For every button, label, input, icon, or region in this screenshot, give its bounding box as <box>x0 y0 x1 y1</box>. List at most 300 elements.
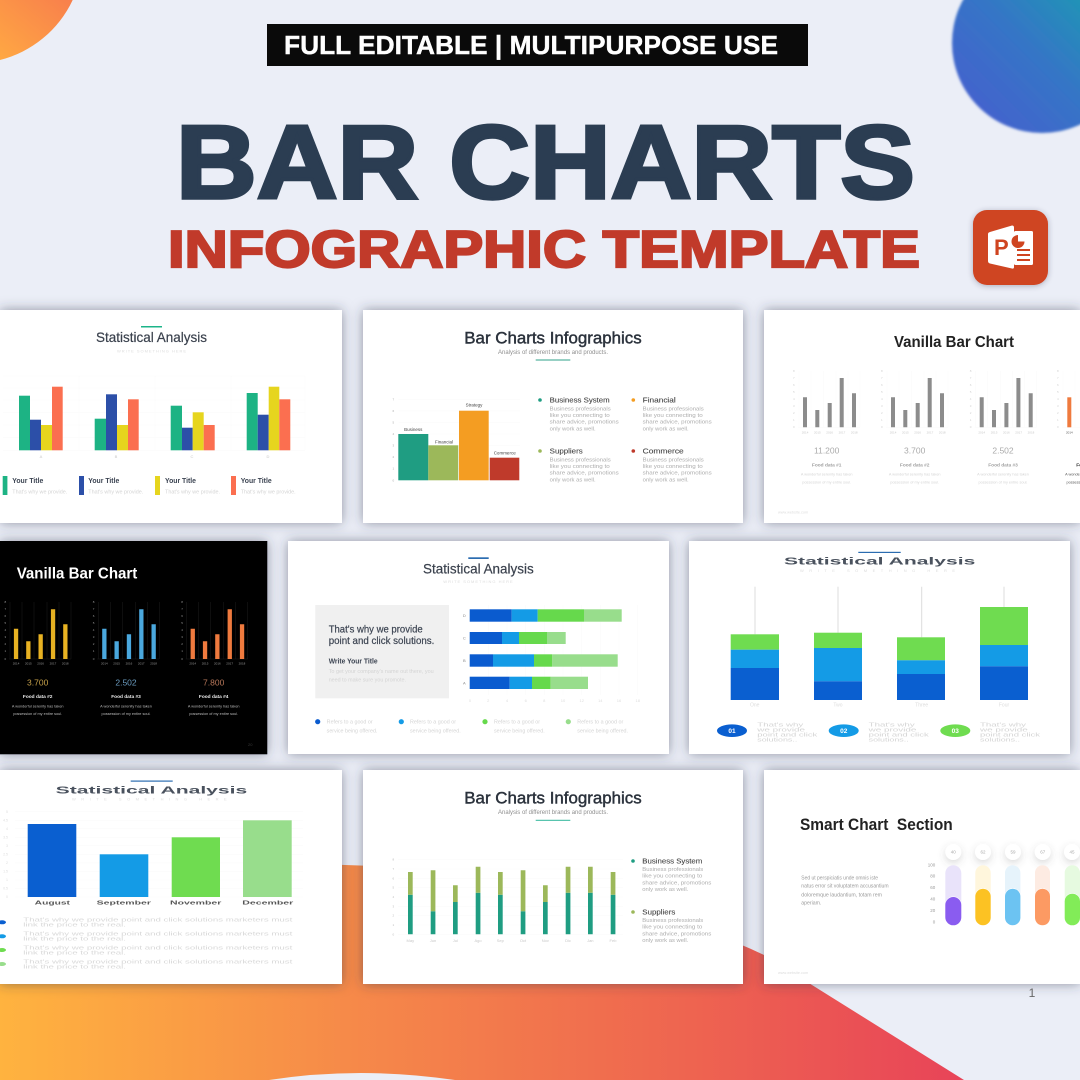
stat: dark food data 3: possession of my entire soul. <box>102 712 150 716</box>
body text: aperiam. <box>801 901 821 907</box>
legend: Your Title <box>88 478 119 485</box>
pill gauge: green <box>1064 844 1080 926</box>
y axis labels: 3 <box>392 444 394 448</box>
stat: food data 1: Food data #1 <box>812 462 842 468</box>
legend <box>0 918 293 971</box>
legend <box>315 719 628 734</box>
stat: dark food data 3: A wonderful serenity has taken <box>100 704 152 708</box>
small chart 1: 4 <box>793 397 795 401</box>
legend: That's why we provide. <box>88 490 144 496</box>
stat: dark food data 4 <box>188 677 240 716</box>
y axis labels: 5 <box>392 420 394 424</box>
legend: That's why we provide point and click solutions marketers must <box>23 960 293 966</box>
gold chart: 4 <box>4 628 6 632</box>
gold chart: 1 <box>4 649 6 653</box>
month labels: Jul <box>453 938 458 943</box>
legend: Your Title <box>241 478 272 485</box>
small chart 4 clipped by edge <box>1057 369 1080 434</box>
stat: food data 3 <box>977 446 1029 484</box>
body text: natus error sit voluptatem accusantium <box>801 884 889 890</box>
y axis labels: 0 <box>933 919 936 924</box>
callout 03 <box>940 723 1041 744</box>
y axis labels: 2 <box>392 455 394 459</box>
small chart 2: 7 <box>881 376 883 380</box>
y axis labels: 1 <box>6 878 8 882</box>
blue chart <box>93 600 159 666</box>
month labels: December <box>242 901 295 907</box>
axis labels: A <box>40 454 43 459</box>
item: commerce: only work as well. <box>643 477 689 483</box>
y axis labels: 0 <box>392 478 394 482</box>
small chart 4 clipped by edge: 5 <box>1057 390 1059 394</box>
panel heading: Statistical Analysis <box>56 785 248 797</box>
gold chart: 2 <box>4 642 6 646</box>
stacked bars lower series <box>408 893 615 934</box>
callout 01 <box>717 723 818 744</box>
pill gauge: blue: 59 <box>1010 850 1016 854</box>
accent line <box>858 552 901 553</box>
small chart 4 clipped by edge: 3 <box>1057 404 1059 408</box>
gold chart: 2014 2015 2016 2017 2018 <box>13 662 69 666</box>
small chart 1: 2014 2015 2016 2017 2018 <box>802 430 858 434</box>
y axis labels: 4 <box>392 895 394 899</box>
axis labels: 4 <box>506 698 509 703</box>
month labels <box>407 938 617 943</box>
month labels: Jun <box>430 938 436 943</box>
item: suppliers: Suppliers <box>642 907 676 916</box>
item: commerce <box>632 446 712 483</box>
y axis labels: 8 <box>392 858 394 862</box>
small chart 2: 4 <box>881 397 883 401</box>
stat: dark food data 3: 2.502 <box>115 677 137 687</box>
axis labels: D <box>267 454 270 459</box>
callout 02: 02 <box>840 728 848 735</box>
y axis labels: 0 <box>6 895 8 899</box>
item: suppliers: share advice, promotions <box>642 931 711 937</box>
orange chart: 2 <box>181 642 183 646</box>
gold chart: 5 <box>4 621 6 625</box>
stacked column four <box>980 607 1028 700</box>
month labels: Ago <box>474 938 482 943</box>
item: business system: Business professionals <box>550 406 611 412</box>
item: financial <box>632 395 712 432</box>
panel: statistical analysis vertical stacked bars <box>689 541 1070 754</box>
callout 01: we provide <box>757 728 805 734</box>
text card: That's why we provide <box>329 623 423 635</box>
text card: Write Your Title <box>329 657 378 666</box>
stacked bar D <box>470 609 622 622</box>
axis labels: 10 <box>561 698 566 703</box>
accent line <box>131 780 173 782</box>
y axis labels: 0 <box>392 932 394 936</box>
month labels <box>35 901 295 907</box>
y axis labels: 3 <box>6 844 8 848</box>
small chart 4 clipped by edge: 1 <box>1057 418 1059 422</box>
panel subheading: WRITE SOMETHING HERE <box>800 568 955 573</box>
banner: full editable: FULL EDITABLE | MULTIPURPOSE USE <box>284 30 778 60</box>
pill gauge: yellow: 62 <box>980 850 986 854</box>
blue chart: 2014 2015 2016 2017 2018 <box>101 662 157 666</box>
pill gauge: purple: 40 <box>951 850 956 854</box>
decorative orange circle top left <box>0 0 73 60</box>
axis labels: C <box>463 636 466 640</box>
small chart 3: 5 <box>970 390 972 394</box>
stat: dark food data 4: Food data #4 <box>199 694 229 700</box>
legend: That's why we provide. <box>165 490 220 496</box>
pill gauge: orange <box>1035 844 1051 926</box>
panel: statistical analysis monthly bars <box>0 770 342 984</box>
small chart 2: 2014 2015 2016 2017 2018 <box>890 430 946 434</box>
axis labels: D <box>463 613 466 618</box>
legend: service being offered. <box>410 728 461 734</box>
panel: bar charts infographics four segments <box>363 310 743 523</box>
small chart 1: 6 <box>793 383 795 387</box>
item: financial: Business professionals <box>643 406 704 412</box>
stat: food data 3: 2.502 <box>992 446 1014 456</box>
panel subheading: Analysis of different brands and products. <box>498 810 608 816</box>
small chart 2: 2 <box>881 411 883 415</box>
panel: vanilla bar chart dark <box>0 541 267 754</box>
orange chart <box>181 600 248 666</box>
orange chart: 2014 2015 2016 2017 2018 <box>189 662 246 666</box>
column labels <box>750 702 1009 708</box>
legend: link the price to the real. <box>23 951 126 957</box>
small chart 1 <box>793 369 860 434</box>
panel: bar charts infographics monthly stacked <box>363 770 743 984</box>
bar labels: Commerce <box>494 450 516 455</box>
item: financial: Financial <box>643 395 676 404</box>
y axis labels: 0.5 <box>3 886 8 890</box>
small chart 2: 1 <box>881 418 883 422</box>
small chart 3: 2014 2015 2016 2017 2018 <box>978 430 1035 434</box>
legend: Your Title <box>165 478 196 485</box>
y axis labels: 5 <box>6 810 8 814</box>
y axis labels: 7 <box>392 397 394 401</box>
item: business system: share advice, promotions <box>550 420 619 426</box>
item: business system: Business System <box>642 856 702 865</box>
stacked column two <box>814 633 862 700</box>
panel heading: Bar Charts Infographics <box>464 328 642 347</box>
column labels: Three <box>915 702 928 708</box>
bar chart <box>398 411 519 480</box>
stat: food data 2: 3.700 <box>904 446 926 456</box>
text card: need to make sure you promote. <box>329 677 406 683</box>
y axis labels: 6 <box>392 876 394 880</box>
item: suppliers: only work as well. <box>642 938 689 944</box>
axis labels: 8 <box>543 698 546 703</box>
legend: link the price to the real. <box>23 923 126 929</box>
stat: dark food data 2 <box>12 677 64 716</box>
item: business system: like you connecting to <box>642 874 702 880</box>
legend: Your Title <box>12 478 43 485</box>
stat: food data 2: A wonderful serenity has taken <box>889 473 941 477</box>
stat: dark food data 2: 3.700 <box>27 677 49 687</box>
small chart 2 <box>881 369 948 434</box>
small chart 3: 8 <box>970 369 972 373</box>
gold chart: 7 <box>4 607 6 611</box>
legend: That's why we provide point and click solutions marketers must <box>23 932 293 938</box>
callout 02: we provide <box>869 728 917 734</box>
small chart 3: 7 <box>970 376 972 380</box>
month labels: November <box>170 901 223 907</box>
small chart 2: 8 <box>881 369 883 373</box>
month labels: Sep <box>497 938 505 943</box>
legend: That's why we provide point and click solutions marketers must <box>23 946 293 952</box>
stacked column three <box>897 637 945 700</box>
gold chart: 3 <box>4 635 6 639</box>
stat: food data 3: possession of my entire soul. <box>979 480 1027 484</box>
panel subheading: Analysis of different brands and products. <box>498 350 608 356</box>
month labels: Feb <box>610 938 617 943</box>
small chart 1: 1 <box>793 418 795 422</box>
legend: That's why we provide. <box>12 490 68 496</box>
blue chart: 3 <box>93 635 95 639</box>
text card: point and click solutions. <box>329 635 434 647</box>
panel subheading: WRITE SOMETHING HERE <box>443 579 513 584</box>
y axis labels: 2 <box>392 914 394 918</box>
panel: smart chart section <box>764 770 1080 984</box>
website footer: www.website.com <box>778 510 808 514</box>
blue chart: 2 <box>93 642 95 646</box>
y axis labels: 7 <box>392 867 394 871</box>
panel heading: Vanilla Bar Chart <box>894 334 1015 351</box>
item: suppliers: like you connecting to <box>642 925 702 931</box>
gold chart: 6 <box>4 614 6 618</box>
legend: Refers to a good or <box>577 720 624 726</box>
item: suppliers: Business professionals <box>642 918 703 924</box>
small chart 2: 5 <box>881 390 883 394</box>
pill gauge: orange: 67 <box>1040 850 1046 854</box>
background wave: orange to red gradient <box>0 863 964 1080</box>
bar labels: Strategy <box>466 403 483 408</box>
panel heading: Vanilla Bar Chart <box>17 565 138 582</box>
small chart 4 clipped by edge: 0 <box>1057 425 1059 429</box>
orange chart: 5 <box>181 621 183 625</box>
small chart 3: 3 <box>970 404 972 408</box>
y axis labels: 2.5 <box>3 852 8 856</box>
orange chart: 4 <box>181 628 183 632</box>
legend: link the price to the real. <box>23 937 126 943</box>
body text: doloremque laudantium, totam rem <box>801 892 882 898</box>
stat: dark food data 3 <box>100 677 152 716</box>
stat: food data 2 <box>889 446 941 484</box>
stat: food data 3: A wonderful serenity has taken <box>977 473 1029 477</box>
stat: dark food data 2: A wonderful serenity has taken <box>12 704 64 708</box>
small chart 3: 4 <box>970 397 972 401</box>
legend: Refers to a good or <box>327 720 373 726</box>
gold chart: 8 <box>4 600 6 604</box>
y axis labels: 80 <box>930 874 936 879</box>
axis labels: 14 <box>598 698 603 703</box>
panel: statistical analysis grouped bars <box>0 310 342 523</box>
orange chart: 3 <box>181 635 183 639</box>
item: business system: like you connecting to <box>550 413 610 419</box>
y axis labels: 5 <box>392 886 394 890</box>
stacked bars upper series <box>408 867 615 911</box>
blue chart: 4 <box>93 628 95 632</box>
y axis labels: 3.5 <box>3 836 8 840</box>
blue chart: 1 <box>93 649 95 653</box>
small chart 3 <box>970 369 1037 434</box>
item: commerce: Business professionals <box>643 457 704 463</box>
small chart 4 clipped by edge: 7 <box>1057 376 1059 380</box>
text card <box>315 605 449 698</box>
website footer: www.website.com <box>778 971 808 975</box>
small chart 3: 2 <box>970 411 972 415</box>
icon: powerpoint: P <box>994 235 1009 260</box>
y axis labels: 100 <box>928 863 936 868</box>
bar chart <box>28 820 292 897</box>
panel heading: Statistical Analysis <box>784 555 976 567</box>
axis labels: 2 <box>487 698 490 703</box>
item: suppliers <box>631 907 711 944</box>
callout 02: That's why <box>869 723 915 729</box>
stat: food data 1: 11.200 <box>814 446 840 456</box>
y axis labels: 6 <box>392 409 394 413</box>
item: financial: like you connecting to <box>643 413 703 419</box>
item: suppliers: Suppliers <box>550 446 583 455</box>
icon: powerpoint <box>973 210 1048 285</box>
item: commerce: Commerce <box>643 446 684 455</box>
small chart 1: 0 <box>793 425 795 429</box>
blue chart: 7 <box>93 607 95 611</box>
legend: service being offered. <box>327 728 377 734</box>
y axis labels: 4.5 <box>3 818 8 822</box>
orange chart: 0 <box>181 657 183 661</box>
item: suppliers: only work as well. <box>550 477 596 483</box>
stacked bar C <box>470 632 566 644</box>
axis labels: A <box>463 680 466 686</box>
pill gauge: green: 45 <box>1069 850 1075 854</box>
small chart 1: 8 <box>793 369 795 373</box>
grid lines <box>398 399 520 469</box>
item: financial: share advice, promotions <box>643 420 712 426</box>
y axis labels: 4 <box>6 827 8 831</box>
callout 02: point and click <box>869 733 929 739</box>
stems <box>755 587 1004 637</box>
legend: service being offered. <box>494 728 545 734</box>
page number: 1 <box>1029 986 1036 1000</box>
blue chart: 5 <box>93 621 95 625</box>
title: bar charts: BAR CHARTS <box>176 105 915 221</box>
pill gauge: blue <box>1005 844 1021 926</box>
page number: 20 <box>248 742 253 747</box>
panel heading: Statistical Analysis <box>423 560 534 576</box>
month labels: September <box>97 901 152 907</box>
small chart 4 clipped by edge: 2014 <box>1066 430 1073 434</box>
axis labels: C <box>191 454 194 459</box>
small chart 4 clipped by edge: 2 <box>1057 411 1059 415</box>
legend: Refers to a good or <box>494 720 540 726</box>
y axis labels: 4 <box>392 432 394 436</box>
stacked bar B <box>470 654 618 667</box>
callout 02: solutions.. <box>869 738 909 744</box>
callout 03: That's why <box>980 723 1027 729</box>
stat: dark food data 4: 7.800 <box>203 677 225 687</box>
accent line <box>536 820 570 821</box>
y axis labels: 40 <box>930 896 936 901</box>
callout 01: point and click <box>757 733 818 739</box>
item: commerce: like you connecting to <box>643 464 703 470</box>
y axis labels <box>928 863 936 924</box>
month labels: Nov <box>542 938 549 943</box>
column labels: One <box>750 702 760 708</box>
small chart 1: 5 <box>793 390 795 394</box>
axis labels: 18 <box>635 698 641 703</box>
axis labels: 0 <box>469 698 472 703</box>
blue chart: 8 <box>93 600 95 604</box>
panel heading: Bar Charts Infographics <box>464 789 642 808</box>
stat: dark food data 4: possession of my entire soul. <box>189 712 238 716</box>
stat: dark food data 3: Food data #3 <box>111 694 141 700</box>
small chart 2: 3 <box>881 404 883 408</box>
axis labels: 12 <box>579 698 585 703</box>
blue chart: 6 <box>93 614 95 618</box>
body text <box>801 875 889 907</box>
item: suppliers: like you connecting to <box>550 464 610 470</box>
pill gauge: yellow <box>975 844 991 926</box>
callout 03: 03 <box>952 728 959 735</box>
stat: food data 1: possession of my entire soul. <box>802 480 851 484</box>
legend: Refers to a good or <box>410 720 456 726</box>
small chart 2: 6 <box>881 383 883 387</box>
callout 01: 01 <box>728 728 736 735</box>
stat: food data 2: possession of my entire soul. <box>890 480 939 484</box>
text card: To get your company's name out there, you <box>329 669 434 675</box>
small chart 4 clipped by edge: 8 <box>1057 369 1059 373</box>
month labels: August <box>35 901 70 907</box>
stat: dark food data 2: possession of my entire soul. <box>13 712 62 716</box>
stat: dark food data 2: Food data #2 <box>23 694 53 700</box>
stat: food data 1 <box>801 446 853 484</box>
item: business system <box>538 395 619 432</box>
small chart 3: 0 <box>970 425 972 429</box>
callout 02 <box>829 723 929 744</box>
group B bars <box>95 394 139 450</box>
bar labels <box>404 403 516 455</box>
panel heading: Smart Chart Section <box>800 816 953 834</box>
item: suppliers: share advice, promotions <box>550 471 619 477</box>
small chart 3: 1 <box>970 418 972 422</box>
bar labels: Business <box>404 427 423 432</box>
item: business system: Business System <box>550 395 610 404</box>
legend: link the price to the real. <box>23 965 126 971</box>
y axis labels: 60 <box>930 885 936 890</box>
y axis labels: 1 <box>392 923 394 927</box>
callout 03: point and click <box>980 733 1041 739</box>
small chart 4 clipped by edge: 4 <box>1057 397 1059 401</box>
y axis labels: 2 <box>6 861 8 865</box>
callout 03: solutions.. <box>980 738 1020 744</box>
gold chart <box>4 600 71 666</box>
grid lines <box>398 860 623 934</box>
stat: food data 2: Food data #2 <box>900 462 930 468</box>
month labels: Jan <box>587 938 594 943</box>
panel subheading: WRITE SOMETHING HERE <box>117 348 186 354</box>
accent line <box>468 557 489 559</box>
orange chart: 6 <box>181 614 183 618</box>
column labels: Two <box>833 702 843 708</box>
banner: full editable <box>267 24 808 66</box>
column labels: Four <box>999 702 1009 708</box>
decorative blue circle top right <box>952 0 1080 133</box>
stat: food data 4 clipped by edge <box>1065 462 1080 484</box>
orange chart: 1 <box>181 649 183 653</box>
body text: Sed ut perspiciatis unde omnis iste <box>801 875 878 881</box>
accent line <box>141 326 162 328</box>
panel heading: Statistical Analysis <box>96 329 207 345</box>
item: business system: share advice, promotions <box>642 880 711 886</box>
